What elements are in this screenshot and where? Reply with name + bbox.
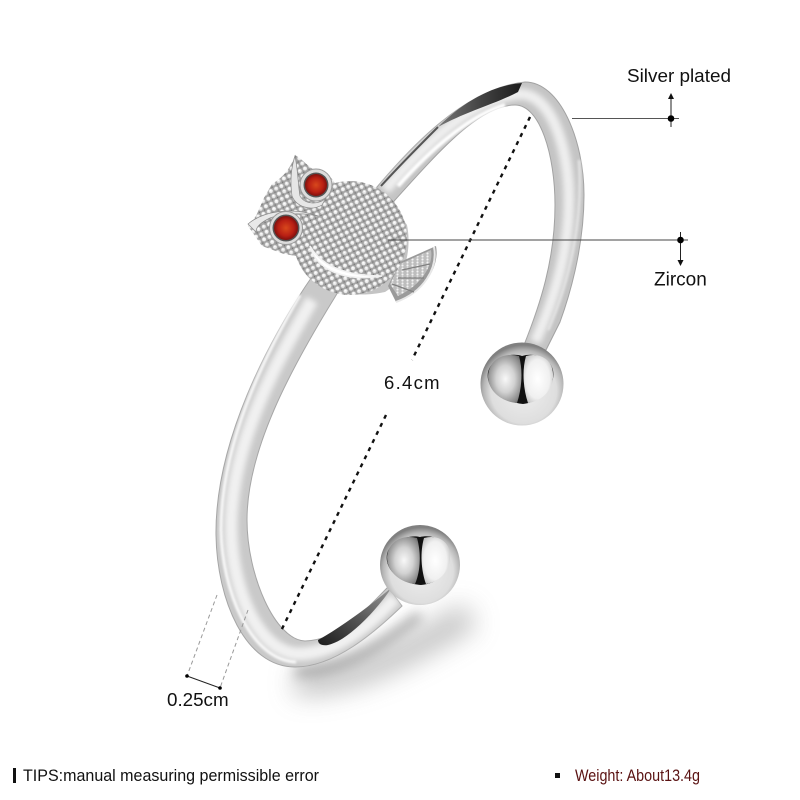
upper arm slit [438,83,522,127]
owl brow [248,211,318,232]
owl eye: right [300,169,332,201]
weight note: Weight: About13.4g [575,766,700,785]
owl body [293,181,407,295]
owl pendant [248,155,437,302]
label: 6.4cm: 6.4cm [384,372,441,393]
callout: zircon [388,232,707,290]
dotted dimension line: 6.4cm [280,117,530,633]
bangle shadow [295,615,470,682]
band width dimension: 0.25cm: 0.25cm [167,689,229,710]
ball end: lower [380,525,460,605]
band width dimension: 0.25cm [167,595,248,710]
owl tail [388,246,437,302]
owl base rim [296,215,409,295]
callout: silver plated: Silver plated [627,66,731,87]
callout: zircon: Zircon [654,270,707,290]
owl wing crescent [310,246,382,278]
owl eye: left [270,212,302,244]
callout: silver plated [572,66,731,127]
tips note: TIPS:manual measuring permissible error [23,766,319,785]
lower arm slit [318,587,392,645]
owl head [248,155,337,257]
bangle: lower arm [216,265,402,667]
ball end: upper [480,342,564,426]
bangle: upper arm [350,82,584,350]
